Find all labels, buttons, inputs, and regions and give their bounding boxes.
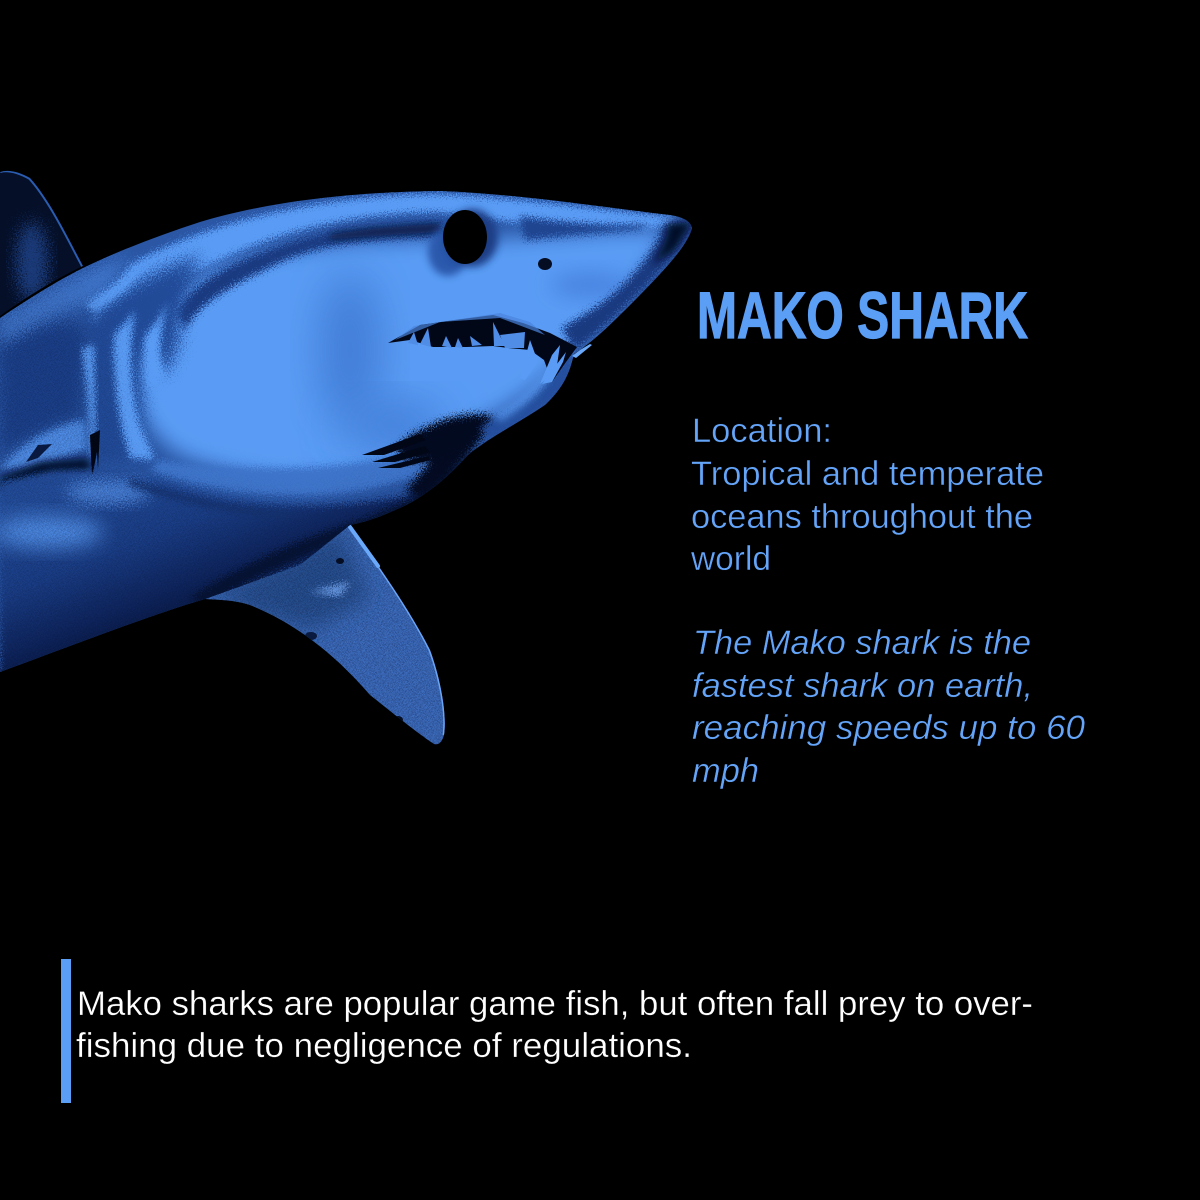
location text block <box>690 412 1044 578</box>
callout text <box>76 985 1033 1065</box>
location text block: world <box>690 540 771 578</box>
mid tone shading on cheek <box>320 272 380 428</box>
illustration: mako shark <box>0 165 700 750</box>
location text block: Location: <box>692 412 832 450</box>
top edge highlight <box>90 194 680 335</box>
gill highlight strips <box>82 258 168 460</box>
nostril <box>538 258 552 270</box>
callout text: fishing due to negligence of regulations. <box>76 1027 692 1065</box>
body base colour <box>0 170 700 680</box>
title: MAKO SHARK <box>697 278 1028 352</box>
mouth with teeth <box>388 313 577 384</box>
location text block: oceans throughout the <box>691 498 1033 536</box>
speed fact text block: The Mako shark is the <box>693 624 1031 662</box>
skin speckle <box>0 280 520 680</box>
speed fact text block <box>692 624 1085 790</box>
pectoral fin <box>200 520 450 750</box>
dark brow band beyond eye <box>520 216 650 240</box>
belly highlights <box>0 516 103 548</box>
belly to fin dark crease <box>190 450 500 605</box>
shark eye <box>443 210 487 264</box>
location text block: Tropical and temperate <box>691 455 1044 493</box>
shoulder shading <box>0 323 85 455</box>
gill slit <box>90 430 100 478</box>
lower body <box>0 450 500 680</box>
gill shadow field <box>90 255 200 465</box>
eye socket <box>428 228 468 276</box>
fin leading edge highlight <box>350 527 378 566</box>
callout text: Mako sharks are popular game fish, but often fall prey to over- <box>77 985 1033 1023</box>
dark jaw patch <box>395 414 492 497</box>
body <box>0 170 700 680</box>
speed fact text block: fastest shark on earth, <box>692 667 1033 705</box>
lower jaw underside <box>480 350 575 440</box>
bright lower lip <box>572 344 592 358</box>
speed fact text block: reaching speeds up to 60 <box>692 709 1085 747</box>
speed fact text block: mph <box>692 752 759 790</box>
dorsal fin <box>0 170 83 316</box>
bright head and flank <box>133 230 672 480</box>
dark brow band <box>176 222 445 330</box>
accent bar <box>61 959 71 1103</box>
snout underside shading <box>562 222 692 350</box>
